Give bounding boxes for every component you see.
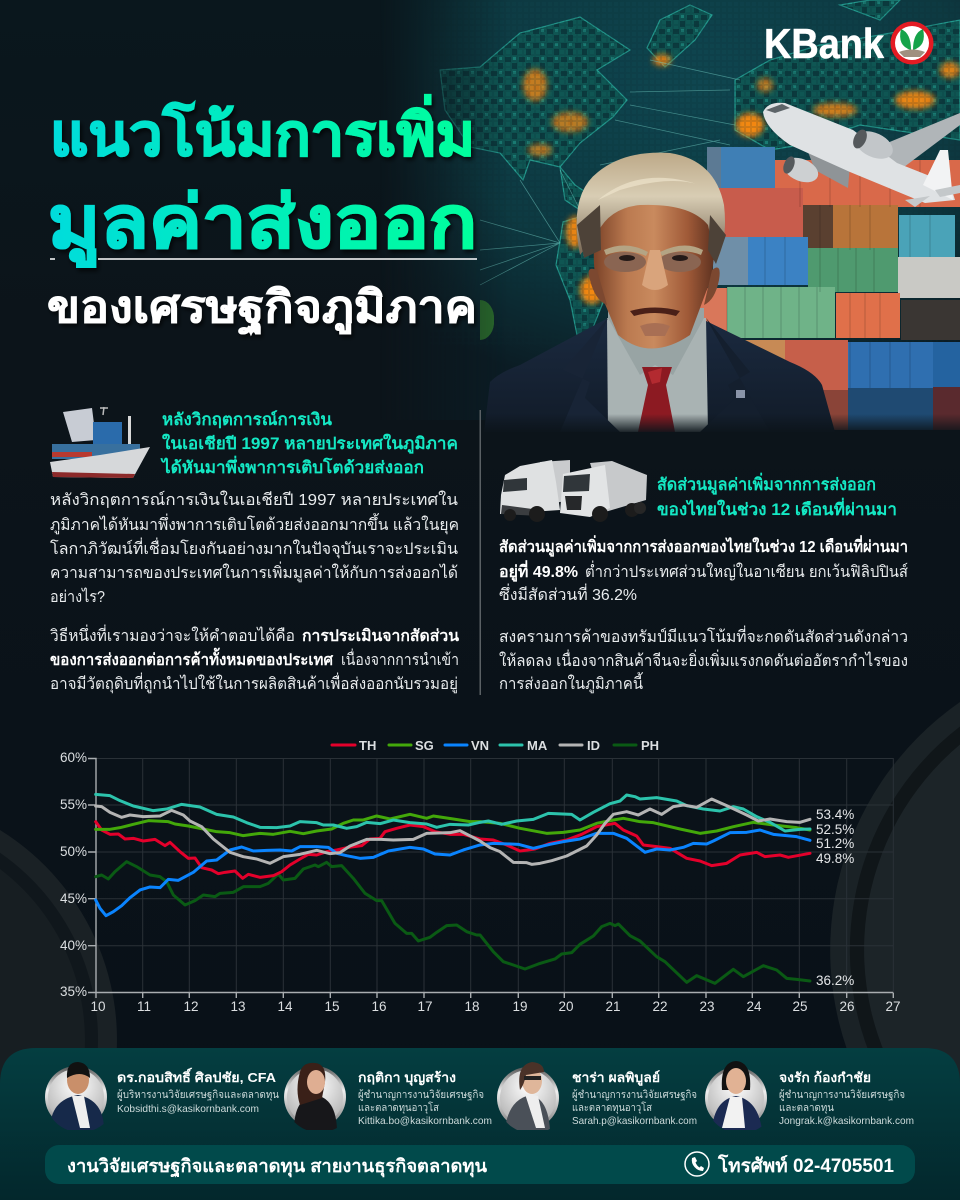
x axis labels: 27	[885, 999, 901, 1014]
x axis labels: 18	[464, 999, 480, 1014]
text block: left paragraph 1: ภูมิภาคได้หันมาพึ่งพาการเติบโตด้วยส่งออกมากขึ้น แล้วในยุค	[50, 513, 459, 535]
contact strip: งานวิจัยเศรษฐกิจและตลาดทุน สายงานธุรกิจตลาดทุน	[67, 1156, 488, 1178]
series: PH	[96, 862, 810, 983]
author 4	[705, 1061, 914, 1130]
chart end labels: 52.5%	[816, 822, 854, 837]
text block: right paragraph 1: อยู่ที่ 49.8%	[499, 560, 578, 583]
icon: phone	[685, 1152, 709, 1176]
title line 2: มูลค่าส่งออก	[48, 183, 477, 268]
KBank logo: KBank	[764, 20, 885, 67]
author 4: และตลาดทุน	[779, 1102, 834, 1114]
y axis labels: 60%	[60, 750, 87, 765]
author 2	[284, 1063, 492, 1130]
text block: right paragraph 1: ซึ่งมีสัดส่วนที่ 36.2%	[499, 583, 637, 604]
author 2: กฤติกา บุญสร้าง	[358, 1070, 456, 1086]
x axis labels: 13	[230, 999, 246, 1014]
text block: left paragraph 1: หลังวิกฤตการณ์การเงินในเอเชียปี 1997 หลายประเทศใน	[50, 490, 458, 509]
author 1: Kobsidthi.s@kasikornbank.com	[117, 1103, 259, 1115]
x axis labels: 19	[512, 999, 528, 1014]
x axis labels: 12	[183, 999, 199, 1014]
y axis labels: 40%	[60, 938, 87, 953]
series: MA	[96, 794, 810, 831]
x axis labels: 23	[699, 999, 715, 1014]
heading: right: ของไทยในช่วง 12 เดือนที่ผ่านมา	[657, 497, 897, 519]
author 2: Kittika.bo@kasikornbank.com	[358, 1115, 492, 1127]
y axis labels: 50%	[60, 844, 87, 859]
series: TH	[96, 822, 810, 878]
text block: right paragraph 1: สัดส่วนมูลค่าเพิ่มจากการส่งออกของไทยในช่วง 12 เดือนที่ผ่านมา	[499, 535, 908, 558]
x axis labels: 26	[839, 999, 855, 1014]
line chart: value added share of exports	[60, 738, 901, 1014]
text block: left paragraph 2	[50, 624, 459, 694]
heading: right: สัดส่วนมูลค่าเพิ่มจากการส่งออก	[657, 472, 876, 496]
author 4: จงรัก ก้องกำชัย	[779, 1070, 871, 1085]
world map background	[380, 0, 960, 420]
heading: left: หลังวิกฤตการณ์การเงิน	[162, 410, 333, 429]
chart legend: PH	[641, 738, 659, 753]
author 1: ผู้บริหารงานวิจัยเศรษฐกิจและตลาดทุน	[117, 1089, 279, 1101]
airplane	[763, 103, 960, 207]
chart legend: VN	[471, 738, 489, 753]
text block: right paragraph 2	[499, 625, 908, 694]
author 3: ชาร่า ผลพิบูลย์	[572, 1070, 660, 1086]
y axis labels: 55%	[60, 797, 87, 812]
author 4: ผู้ชำนาญการงานวิจัยเศรษฐกิจ	[779, 1089, 905, 1101]
chart legend: TH	[359, 738, 376, 753]
shipping containers	[700, 147, 960, 430]
chart legend: MA	[527, 738, 548, 753]
text block: left paragraph 1: อย่างไร?	[50, 587, 105, 606]
series: ID	[96, 799, 810, 864]
heading: left: ในเอเชียปี 1997 หลายประเทศในภูมิภาค	[162, 433, 458, 455]
author 3: และตลาดทุนอาวุโส	[572, 1101, 653, 1114]
title	[47, 94, 477, 335]
x axis labels: 21	[605, 999, 621, 1014]
title line 1: แนวโน้มการเพิ่ม	[50, 94, 475, 168]
x axis labels: 17	[417, 999, 433, 1014]
x axis labels: 11	[137, 999, 151, 1014]
chart end labels	[816, 807, 854, 988]
text block: right paragraph 1: ต่ำกว่าประเทศส่วนใหญ่ในอาเซียน ยกเว้นฟิลิปปินส์	[585, 560, 908, 581]
y axis labels	[60, 750, 87, 999]
author 3: ผู้ชำนาญการงานวิจัยเศรษฐกิจ	[572, 1089, 697, 1101]
background tyre right	[830, 702, 960, 1100]
x axis labels: 20	[558, 999, 574, 1014]
chart end labels: 51.2%	[816, 836, 854, 851]
text block: left paragraph 2: วิธีหนึ่งที่เรามองว่าจะให้คำตอบได้คือ	[50, 624, 295, 645]
background tyre left	[0, 830, 117, 1100]
text block: right paragraph 2: การส่งออกในภูมิภาคนี้	[499, 672, 643, 694]
chart legend: ID	[587, 738, 600, 753]
x axis labels	[90, 999, 901, 1014]
text block: left paragraph 2: การประเมินจากสัดส่วน	[302, 627, 459, 645]
chart end labels: 53.4%	[816, 807, 854, 822]
title line 3: ของเศรษฐกิจภูมิภาค	[47, 283, 477, 335]
author 2: และตลาดทุนอาวุโส	[358, 1101, 440, 1114]
text block: right paragraph 2: ให้ลดลง เนื่องจากสินค้าจีนจะยิ่งเพิ่มแรงกดดันต่ออัตรากำไรของ	[499, 649, 908, 670]
text block: left paragraph 2: อาจมีวัตถุดิบที่ถูกนำไปใช้ในการผลิตสินค้าเพื่อส่งออกนับรวมอยู่	[50, 672, 458, 694]
text block: right paragraph 2: สงครามการค้าของทรัมป์มีแนวโน้มที่จะกดดันสัดส่วนดังกล่าว	[499, 625, 908, 646]
text block: left paragraph 2: เนื่องจากการนำเข้า	[341, 648, 459, 669]
heading: left	[160, 410, 458, 477]
author 1: ดร.กอบสิทธิ์ ศิลปชัย, CFA	[117, 1067, 277, 1085]
x axis labels: 15	[324, 999, 340, 1014]
author 3	[497, 1062, 697, 1130]
footer panel	[0, 1048, 960, 1200]
contact strip: โทรศัพท์ 02-4705501	[717, 1154, 894, 1177]
x axis labels: 25	[792, 999, 808, 1014]
author 3: Sarah.p@kasikornbank.com	[572, 1115, 697, 1127]
author 1	[45, 1062, 279, 1130]
chart legend	[332, 738, 659, 753]
x axis labels: 14	[277, 999, 293, 1014]
text block: right paragraph 1	[499, 535, 908, 604]
chart legend: SG	[415, 738, 434, 753]
text block: left paragraph 2: ของการส่งออกต่อการค้าทั้งหมดของประเทศ	[50, 647, 334, 669]
text block: left paragraph 1: โลกาภิวัฒน์ที่เชื่อมโยงกันอย่างมากในปัจจุบันเราจะประเมิน	[50, 537, 458, 559]
chart end labels: 36.2%	[816, 973, 854, 988]
author 4: Jongrak.k@kasikornbank.com	[779, 1115, 914, 1127]
author 2: ผู้ชำนาญการงานวิจัยเศรษฐกิจ	[358, 1089, 484, 1101]
text block: left paragraph 1: ความสามารถของประเทศในการเพิ่มมูลค่าให้กับการส่งออกได้	[50, 561, 458, 583]
x axis labels: 22	[652, 999, 668, 1014]
y axis labels: 45%	[60, 891, 87, 906]
x axis labels: 16	[371, 999, 387, 1014]
data lines	[96, 794, 810, 983]
series: SG	[96, 814, 810, 836]
icon: trucks	[500, 460, 647, 522]
x axis labels: 24	[746, 999, 762, 1014]
series: VN	[96, 830, 810, 916]
portrait illustration	[484, 153, 960, 434]
x axis labels: 10	[90, 999, 106, 1014]
chart end labels: 49.8%	[816, 851, 854, 866]
heading: right	[657, 472, 897, 519]
text block: left paragraph 1	[50, 490, 459, 606]
y axis labels: 35%	[60, 984, 87, 999]
contact strip	[45, 1145, 915, 1184]
heading: left: ได้หันมาพึ่งพาการเติบโตด้วยส่งออก	[160, 455, 424, 477]
icon: container ship	[50, 407, 150, 478]
